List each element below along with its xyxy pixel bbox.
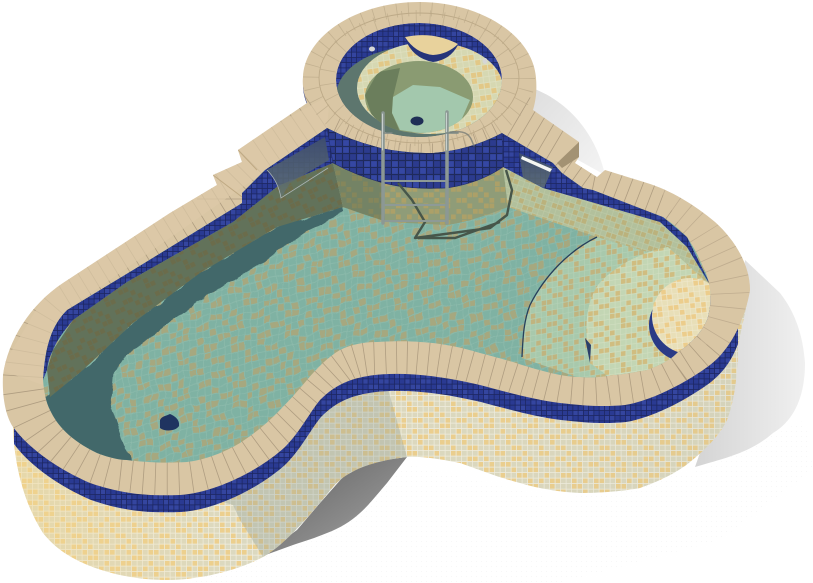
shadow: right side of pool xyxy=(695,260,805,467)
tub blue wall xyxy=(336,23,502,137)
outer tiled wall xyxy=(13,290,750,580)
blue band right wall xyxy=(502,133,712,288)
blue band left wall xyxy=(43,128,333,380)
floor mosaic xyxy=(43,128,710,463)
tub well wall xyxy=(365,61,473,133)
first pool step xyxy=(522,237,656,378)
tub front blue wall xyxy=(327,128,503,188)
right waterfall xyxy=(519,153,553,188)
pool interior xyxy=(43,128,710,463)
back wall darkening xyxy=(333,163,385,221)
corner seat riser xyxy=(649,296,710,358)
stone coping xyxy=(0,2,760,495)
tub bench shelf xyxy=(357,42,503,134)
hot tub interior xyxy=(336,23,503,146)
ladder xyxy=(382,112,474,223)
step riser lines xyxy=(522,237,597,357)
tub seat riser xyxy=(405,37,458,62)
well floor xyxy=(392,85,470,135)
shadow: cast under the curved bay xyxy=(260,457,407,557)
second pool step xyxy=(586,247,715,385)
ground stipple xyxy=(190,420,813,583)
left wall shadow on floor xyxy=(40,207,343,470)
main floor drain xyxy=(160,414,179,430)
jets xyxy=(369,46,488,64)
exterior blue tile band xyxy=(14,317,738,512)
tub submerged left wall xyxy=(337,48,501,137)
left wall tile xyxy=(47,163,343,397)
corner seat xyxy=(652,278,710,352)
back wall tile under tub xyxy=(333,163,508,225)
left waterfall xyxy=(267,137,329,198)
shadow: behind hot tub xyxy=(530,88,605,175)
ladder shadow on wall and floor xyxy=(398,170,512,238)
right arm end face xyxy=(557,142,579,168)
step platform front xyxy=(562,173,583,192)
tub seat xyxy=(405,35,458,55)
well shaded wall xyxy=(365,68,400,132)
step riser wedge xyxy=(585,338,591,363)
hot tub exterior blue edge xyxy=(303,11,535,159)
right wall tile xyxy=(503,167,712,290)
well drain xyxy=(410,116,424,126)
